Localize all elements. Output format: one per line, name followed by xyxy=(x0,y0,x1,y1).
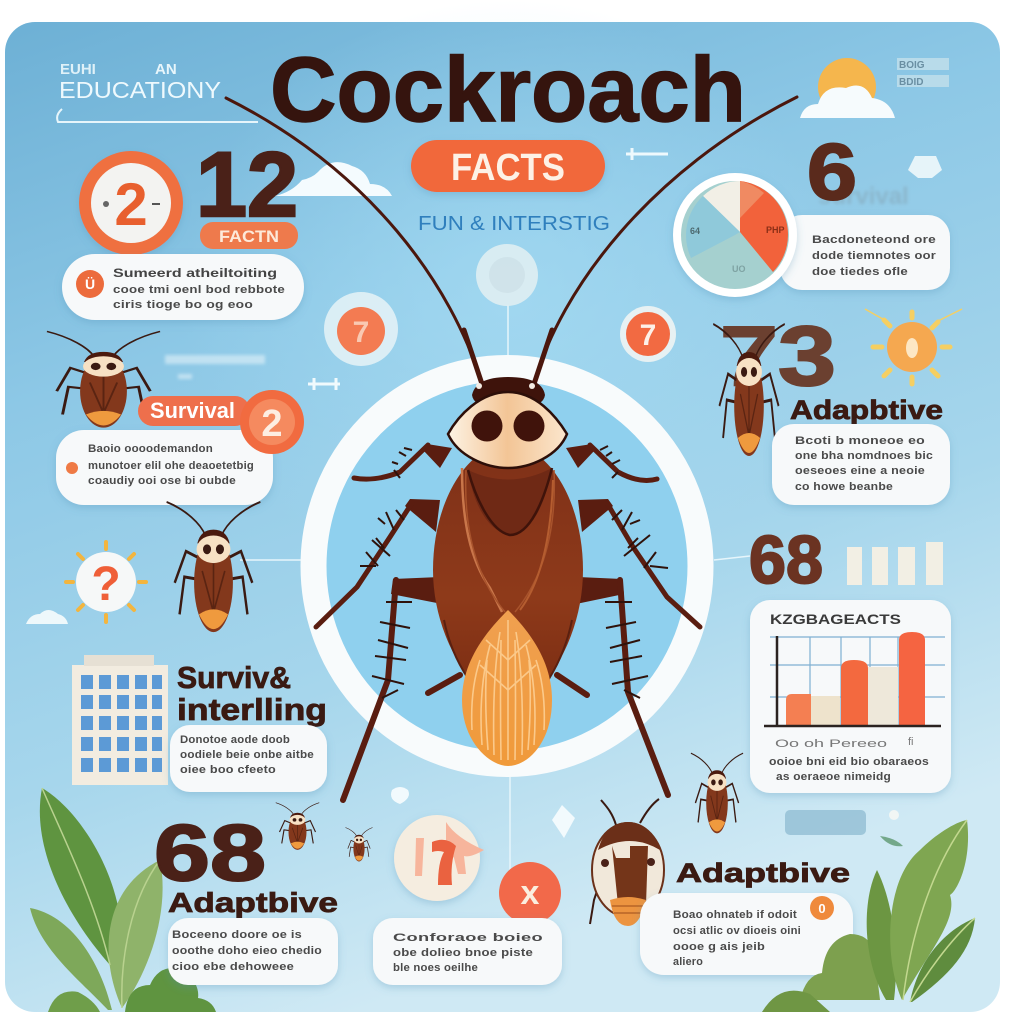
number 73: 73 xyxy=(720,309,836,403)
card: bottom center: ble noes oeilhe xyxy=(393,962,478,974)
small plane top xyxy=(626,148,668,160)
card: adaptive bottom left: cioo ebe dehoweee xyxy=(172,961,294,973)
badge: 2 survival: 2 xyxy=(261,403,283,445)
pie chart: 64 xyxy=(690,226,700,236)
question sun icon xyxy=(66,542,146,622)
survival label: Survival xyxy=(150,398,235,423)
subtitle: FUN & INTERSTIG xyxy=(418,213,610,235)
small roach right top xyxy=(713,324,785,456)
facts pill xyxy=(411,140,605,192)
top-right sun and cloud: BOIG xyxy=(899,60,925,71)
number 6: 6 xyxy=(807,127,857,216)
card: top-left fact: Sumeerd atheiltoiting xyxy=(113,266,277,280)
antennae xyxy=(226,97,797,384)
small badge: 7 right xyxy=(620,306,676,362)
badge: bottom center illustration xyxy=(394,815,484,901)
small white emblem xyxy=(908,156,942,178)
card: adaptive bottom right: oooe g ais jeib xyxy=(673,941,765,953)
central small icon xyxy=(476,244,538,306)
eyes xyxy=(472,410,502,442)
wing details xyxy=(444,468,572,692)
fact label pill: FACTN xyxy=(219,227,279,246)
chart axes xyxy=(764,636,941,726)
roach left top xyxy=(47,331,160,428)
fact label pill xyxy=(200,222,298,249)
heading: adaptive bottom left: Adaptbive xyxy=(168,887,338,918)
bar chart card: ooioe bni eid bio obaraeos xyxy=(769,756,929,768)
card: top-right fact: dode tiemnotes oor xyxy=(812,250,937,262)
orange tail segment xyxy=(462,610,552,766)
left plant xyxy=(30,788,216,1012)
card: top-left fact: ciris tioge bo og eoo xyxy=(113,299,253,311)
leg thighs xyxy=(391,444,624,604)
card: survival xyxy=(56,430,273,505)
faded caption left xyxy=(165,355,265,379)
header label: an educational xyxy=(57,61,258,122)
heading: survive & interesting xyxy=(177,660,327,727)
small badge: 7 right: 7 xyxy=(640,319,656,352)
head shield xyxy=(448,392,567,468)
card: survive: oiee boo cfeeto xyxy=(180,764,276,776)
card: bottom center xyxy=(373,918,562,985)
bar chart card: KZGBAGEACTS xyxy=(770,611,901,627)
card: survival: Baoio oooodemandon xyxy=(88,443,213,455)
card: adaptive right xyxy=(772,424,950,505)
top-right sun and cloud xyxy=(800,58,949,118)
card: survival: munotoer elil ohe deaoetetbig xyxy=(88,460,254,472)
card: survive: Donotoe aode doob xyxy=(180,734,290,746)
right plant xyxy=(762,820,975,1012)
center glow xyxy=(180,0,840,600)
bar chart card xyxy=(750,600,951,793)
header label: an educational: EDUCATIONY xyxy=(59,77,221,103)
card: top-left fact: cooe tmi oenl bod rebbote xyxy=(113,284,285,296)
faded caption right: survival xyxy=(818,183,909,210)
header label: an educational: AN xyxy=(155,61,177,78)
badge: orange x xyxy=(499,862,561,924)
connector lines xyxy=(240,305,750,880)
small badge: 7 left xyxy=(324,292,398,366)
badge: 2 survival xyxy=(240,390,304,454)
card: adaptive bottom right: ocsi atlic ov dioeis oini xyxy=(673,925,801,937)
card: adaptive right: Bcoti b moneoe eo xyxy=(795,435,925,447)
card: top-right fact: Bacdoneteond ore xyxy=(812,234,936,246)
card: adaptive bottom left: Boceeno doore oe is xyxy=(172,929,302,941)
title: Cockroach xyxy=(270,39,746,141)
card: survival: coaudiy ooi ose bi oubde xyxy=(88,475,236,487)
antenna sockets xyxy=(476,383,482,389)
leg spines xyxy=(360,446,668,698)
bar chart card: fi xyxy=(908,736,914,748)
top-left cloud xyxy=(275,162,392,196)
card: bottom center: obe dolieo bnoe piste xyxy=(393,947,533,959)
bar chart card: Oo oh Pereeo xyxy=(775,738,887,750)
card: adaptive bottom right: aliero xyxy=(673,956,703,968)
number 68 right: 68 xyxy=(749,522,823,598)
card: adaptive bottom left xyxy=(168,918,338,985)
tiny roach B xyxy=(345,828,373,861)
pie chart: PHP xyxy=(766,225,785,235)
roach bottom center large xyxy=(590,799,664,926)
chart bars xyxy=(786,632,925,726)
card: survive xyxy=(170,725,327,792)
card: adaptive bottom right: Boao ohnateb if odoit xyxy=(673,909,797,921)
head cap xyxy=(472,377,545,406)
glass pill icon xyxy=(785,810,903,846)
heading: adaptive right: Adapbtive xyxy=(790,395,943,425)
legs xyxy=(316,445,700,800)
survival label xyxy=(138,396,250,426)
pie chart: UO xyxy=(732,264,746,274)
card: top-left fact: Ü xyxy=(85,276,95,292)
question sun icon: ? xyxy=(91,558,121,611)
pale bars icon xyxy=(847,542,943,585)
sun icon right xyxy=(865,309,962,384)
badge: orange x: x xyxy=(521,874,540,912)
abdomen shell xyxy=(433,442,583,700)
card: adaptive bottom left: ooothe doho eieo chedio xyxy=(172,945,322,957)
heading: survive & interesting: interlling xyxy=(177,692,327,727)
bar chart card: as oeraeoe nimeidg xyxy=(776,771,891,783)
header label: an educational: EUHI xyxy=(60,61,96,78)
central ring xyxy=(314,368,700,764)
small badge: 7 left: 7 xyxy=(353,316,369,349)
card: adaptive right: oeseoes eine a neoie xyxy=(795,465,925,477)
card: bottom center: Conforaoe boieo xyxy=(393,932,543,944)
card: top-right fact xyxy=(780,215,950,290)
small cloud left xyxy=(26,610,68,624)
pie chart xyxy=(673,173,797,297)
heading: survive & interesting: Surviv& xyxy=(177,660,291,695)
top-right sun and cloud: BDID xyxy=(899,77,923,88)
facts pill: FACTS xyxy=(451,147,565,189)
card: survive: oodiele beie onbe aitbe xyxy=(180,749,314,761)
chart grid xyxy=(770,637,945,726)
heading: adaptive bottom right: Adaptbive xyxy=(676,858,850,888)
badge: number 2: 2 xyxy=(114,171,148,238)
central cockroach xyxy=(226,97,797,800)
card: adaptive bottom right: 0 xyxy=(818,901,826,916)
small plane mid-left xyxy=(308,378,340,390)
number 68 bottom left: 68 xyxy=(154,808,266,897)
card: adaptive right: co howe beanbe xyxy=(795,481,893,493)
white tag decorations xyxy=(391,787,575,838)
card: adaptive right: one bha nomdnoes bic xyxy=(795,450,933,462)
card: top-left fact xyxy=(62,254,304,320)
tail stripes xyxy=(472,620,544,760)
roach bottom right small xyxy=(691,753,743,833)
badge: number 2 xyxy=(79,151,183,255)
tiny roach A xyxy=(276,803,319,850)
card: top-right fact: doe tiedes ofle xyxy=(812,266,908,278)
roach left middle xyxy=(167,502,260,632)
building icon xyxy=(72,655,168,785)
number 12: 12 xyxy=(196,134,298,236)
card: adaptive bottom right xyxy=(640,893,853,975)
